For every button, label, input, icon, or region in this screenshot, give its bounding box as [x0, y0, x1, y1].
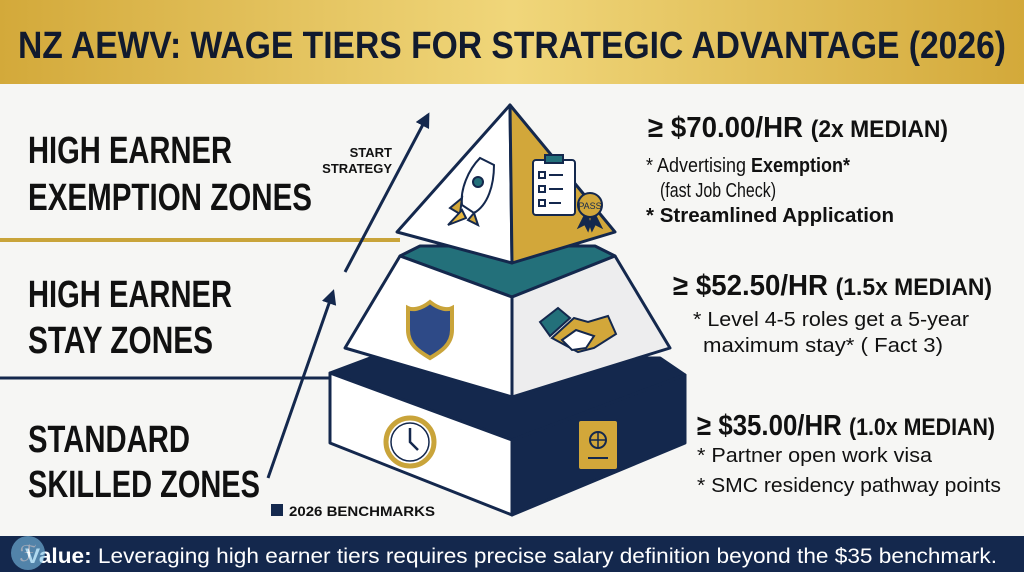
tier 3 text: ≥ $35.00/HR (1.0x MEDIAN): [697, 410, 995, 442]
arrow: lower strategy arrow: [268, 292, 333, 478]
text: start strategy: [322, 145, 392, 176]
label: high earner stay zones: HIGH EARNER: [28, 274, 232, 316]
logo: [11, 536, 45, 570]
bottom tier: [330, 358, 685, 515]
title banner: [0, 0, 1024, 84]
icon: clock: [386, 418, 434, 466]
tier 1 text: ≥ $70.00/HR (2x MEDIAN): [648, 112, 948, 144]
text: start strategy: STRATEGY: [322, 161, 392, 176]
divider lines: [0, 238, 400, 242]
tier 2 text: * Level 4-5 roles get a 5-year: [693, 309, 969, 331]
label: standard skilled zones: [28, 419, 260, 506]
label: high earner stay zones: STAY ZONES: [28, 320, 213, 362]
tier 3 text: * Partner open work visa: [697, 445, 933, 467]
footer bar: [0, 536, 1024, 572]
icon: shield: [408, 302, 452, 358]
tier 3 text: * SMC residency pathway points: [697, 475, 1001, 497]
icon: passport: [578, 420, 618, 470]
label: high earner exemption zones: EXEMPTION ZONES: [28, 177, 312, 219]
label: standard skilled zones: STANDARD: [28, 419, 190, 461]
tier 2 text: ≥ $52.50/HR (1.5x MEDIAN): [673, 270, 992, 302]
tier 1 text: * Streamlined Application: [646, 205, 894, 227]
icon: clipboard pass: [533, 155, 602, 230]
pyramid: [330, 105, 685, 515]
tier 2 text: maximum stay* ( Fact 3): [703, 335, 943, 357]
tier 1 text: * Advertising Exemption*: [646, 155, 850, 177]
label: high earner stay zones: [28, 274, 232, 362]
label: high earner exemption zones: HIGH EARNER: [28, 130, 232, 172]
tier 2 text: [673, 270, 992, 357]
logo: ℱ: [19, 541, 37, 566]
label: standard skilled zones: SKILLED ZONES: [28, 464, 260, 506]
icon: handshake: [540, 308, 616, 352]
top tier: [397, 105, 615, 263]
tier 1 text: [646, 112, 948, 227]
text: start strategy: START: [350, 145, 392, 160]
legend: 2026 benchmarks: 2026 BENCHMARKS: [289, 503, 435, 519]
arrow: long strategy arrow: [345, 115, 428, 272]
label: high earner exemption zones: [28, 130, 312, 219]
footer bar: Value: Leveraging high earner tiers requires precise salary definition beyond the $35 benchmark.: [25, 545, 997, 568]
tier 1 text: (fast Job Check): [660, 180, 776, 202]
tier 3 text: [697, 410, 1001, 497]
icon: rocket: [448, 158, 494, 225]
icon: clipboard pass: PASS: [578, 201, 602, 211]
middle tier: [345, 246, 670, 397]
